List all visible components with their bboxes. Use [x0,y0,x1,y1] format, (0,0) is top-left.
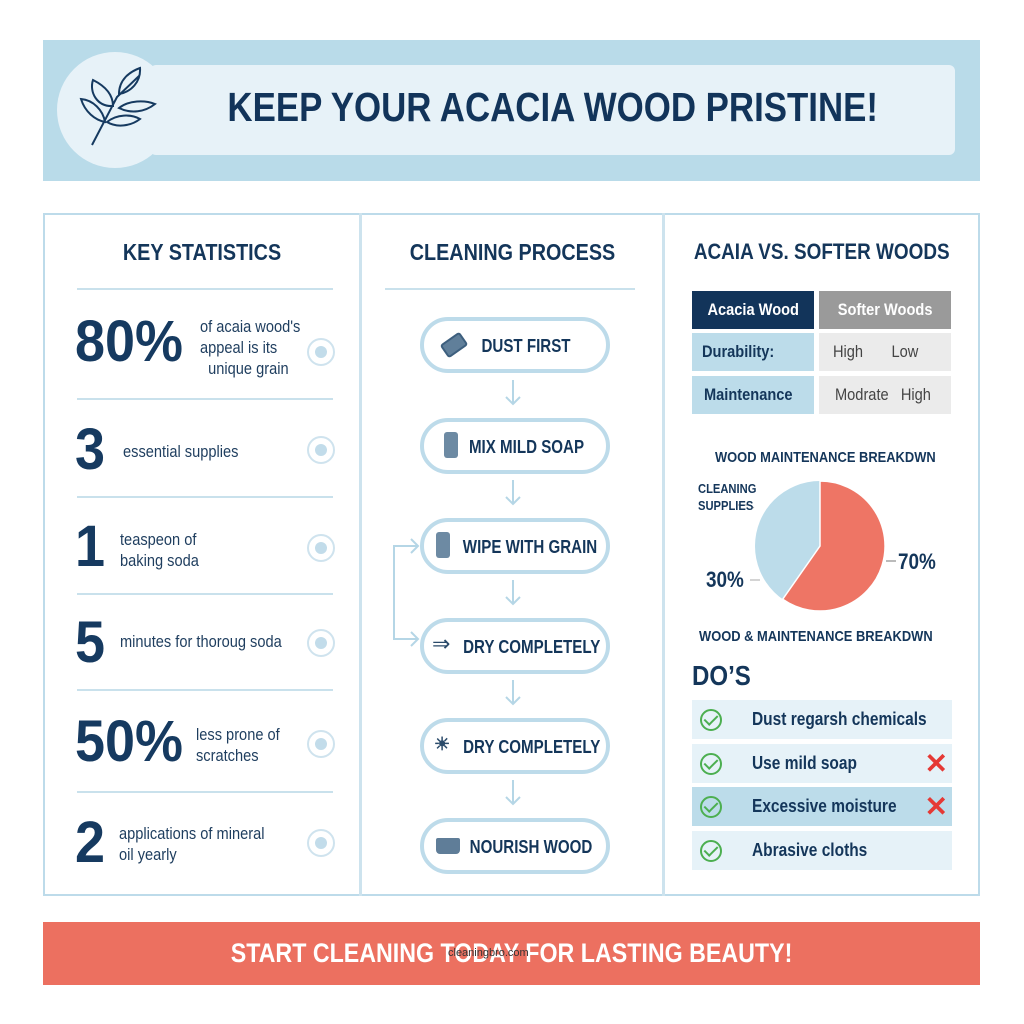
stat 5: 5 [75,610,105,675]
icon: leaf circle [57,52,173,168]
stat 3: essential supplies [123,442,238,461]
do's list: ✕ [925,748,948,779]
step 5: ☀ [434,734,450,754]
do's list [692,700,952,870]
arrow [505,480,521,506]
loop arrow [393,538,420,647]
comparison table: Maintenance [704,385,793,404]
step 1: DUST FIRST [481,336,571,356]
step 2: MIX MILD SOAP [469,437,584,457]
stat 2: oil yearly [119,845,177,864]
step 3 [420,518,610,574]
footer banner: START CLEANING TODAY FOR LASTING BEAUTY! [231,938,792,968]
stat 80%: appeal is its [200,338,277,357]
stat 1: 1 [75,514,105,579]
heading: CLEANING PROCESS [409,239,615,265]
panel: key statistics [75,239,335,875]
pie chart: CLEANING [698,481,756,496]
heading: ACAIA VS. SOFTER WOODS [694,239,949,264]
stat 80%: 80% [75,309,183,374]
do's list: Abrasive cloths [752,840,867,860]
step 6: NOURISH WOOD [470,837,592,857]
title text: KEEP YOUR ACACIA WOOD PRISTINE! [227,84,878,130]
stat 50% [75,709,335,774]
stat 80% [75,309,335,378]
step 3: WIPE WITH GRAIN [463,537,597,557]
stat 3: 3 [75,417,105,482]
stat 2: 2 [75,810,105,875]
comparison table: High Low [833,342,918,361]
do's list: Use mild soap [752,753,857,773]
step 4: ⇒ [432,631,450,656]
step 5 [420,718,610,774]
comparison table: Softer Woods [838,300,932,319]
pie chart: 30% [706,567,744,592]
title bar [150,65,955,155]
do's heading: DO’S [692,660,751,691]
step 5: DRY COMPLETELY [463,737,600,757]
pie chart: WOOD MAINTENANCE BREAKDWN [715,449,935,466]
pie chart: WOOD & MAINTENANCE BREAKDWN [699,628,933,645]
main panel frame [43,213,980,896]
arrow [505,780,521,806]
stat 50%: 50% [75,709,183,774]
arrow [505,680,521,706]
stat 80%: unique grain [208,359,289,378]
do's list: Excessive moisture [752,796,897,816]
pie chart: SUPPLIES [698,498,753,513]
header banner [43,40,980,181]
heading: KEY STATISTICS [123,239,281,265]
step 4: DRY COMPLETELY [463,637,600,657]
comparison table: Durability: [702,342,774,361]
stat 1: teaspeon of [120,530,196,549]
step 1 [420,317,610,373]
stat 50%: scratches [196,746,259,765]
step 6 [420,818,610,874]
comparison table: Acacia Wood [707,300,799,319]
step 2 [420,418,610,474]
stat 2 [75,810,335,875]
arrow [505,380,521,406]
stat 5: minutes for thoroug soda [120,632,282,651]
stat 3 [75,417,335,482]
stat 1 [75,514,335,579]
pie chart: 70% [898,549,936,574]
stat 50%: less prone of [196,725,280,744]
stat 5 [75,610,335,675]
do's list: Dust regarsh chemicals [752,709,927,729]
pie chart [698,449,936,645]
comparison table [692,291,951,414]
footer banner [43,922,980,985]
step 4 [420,618,610,674]
stat 2: applications of mineral [119,824,264,843]
do's list: ✕ [925,791,948,822]
arrow [505,580,521,606]
stat 80%: of acaia wood's [200,317,300,336]
watermark: cleaningbro.com [448,947,529,959]
comparison table: Modrate High [835,385,931,404]
stat 1: baking soda [120,551,199,570]
